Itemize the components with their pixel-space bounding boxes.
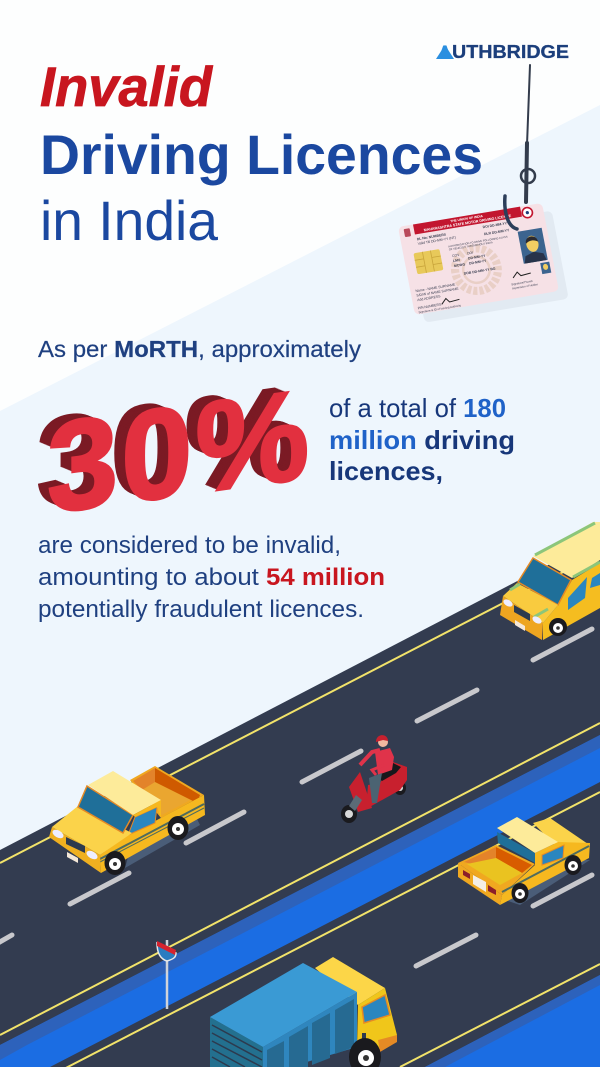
- driving licence card: DOB DD-MM-YY BG: [463, 267, 496, 276]
- road surface: [0, 538, 600, 1067]
- driving licence card: LMV: [453, 258, 461, 263]
- driving licence card: DD-MM-YY: [468, 254, 486, 261]
- driving licence card: DLR DD-MM-YY: [484, 228, 510, 236]
- driving licence card: AUTHORISATION TO DRIVE FOLLOWING CLASS: [448, 235, 508, 248]
- title: Invalid: [40, 55, 214, 118]
- conclusion text: potentially fraudulent licences.: [38, 596, 364, 623]
- stat description: of a total of 180: [329, 393, 506, 423]
- holder photo: [518, 228, 551, 277]
- driving licence card: MCWG: [454, 262, 466, 268]
- big 30 percent figure: 30%: [47, 362, 312, 541]
- driving licence card: DOI: [467, 251, 474, 256]
- driving licence card: Valid Till DD-MM-YY (NT): [417, 235, 456, 246]
- blue roadside: [425, 975, 600, 1067]
- van top right: [500, 522, 600, 640]
- driving licence card: OF VEHICLES THROUGHOUT INDIA: [448, 240, 493, 251]
- lane dashes: [0, 629, 592, 966]
- driving licence card: DOI DD-MM-YY: [482, 221, 508, 229]
- driving licence card: Signature & ID of Issuing Authority: [418, 303, 462, 314]
- driving licence card: S/D/W of NAME SURNAME: [416, 287, 460, 298]
- conclusion text: are considered to be invalid,: [38, 532, 341, 559]
- driving licence card: Impression of Holder: [512, 282, 538, 290]
- title: Driving Licences: [40, 123, 483, 186]
- driving licence card: Name - NAME SURNAME: [415, 282, 456, 293]
- logo: Authbridge: UTHBRIDGE: [452, 42, 569, 62]
- driving licence card: [398, 202, 569, 324]
- driving licence card: COV: [452, 253, 461, 258]
- driving licence card: Add ADDRESS: [417, 294, 441, 302]
- driving licence card: DL No: NUMBERS: [417, 232, 447, 241]
- title: [40, 55, 483, 252]
- driving licence card: THE UNION OF INDIA: [450, 214, 484, 223]
- delivery truck: [210, 957, 397, 1067]
- conclusion text: [38, 532, 385, 623]
- fishing line and hook: [505, 65, 535, 229]
- conclusion text: amounting to about 54 million: [38, 564, 385, 591]
- blue median strip: [0, 735, 600, 1067]
- logo: Authbridge: A: [438, 43, 452, 64]
- stat description: [329, 393, 515, 486]
- driving licence card: Signature/Thumb: [511, 279, 533, 286]
- stat description: licences,: [329, 456, 443, 486]
- scooter rider: [341, 735, 407, 823]
- title: in India: [40, 189, 219, 252]
- chip: [413, 249, 443, 274]
- driving licence card: MAHARASHTRA STATE MOTOR DRIVING LICENCE: [423, 214, 512, 232]
- pickup truck right: [458, 817, 590, 905]
- pickup truck left: [49, 766, 205, 875]
- driving licence card: PIN NUMBERS: [417, 302, 442, 310]
- road sign: [157, 940, 176, 1009]
- stat description: million driving: [329, 425, 515, 455]
- driving licence card: DD-MM-YY: [469, 259, 487, 266]
- intro text: As per MoRTH, approximately: [38, 336, 361, 362]
